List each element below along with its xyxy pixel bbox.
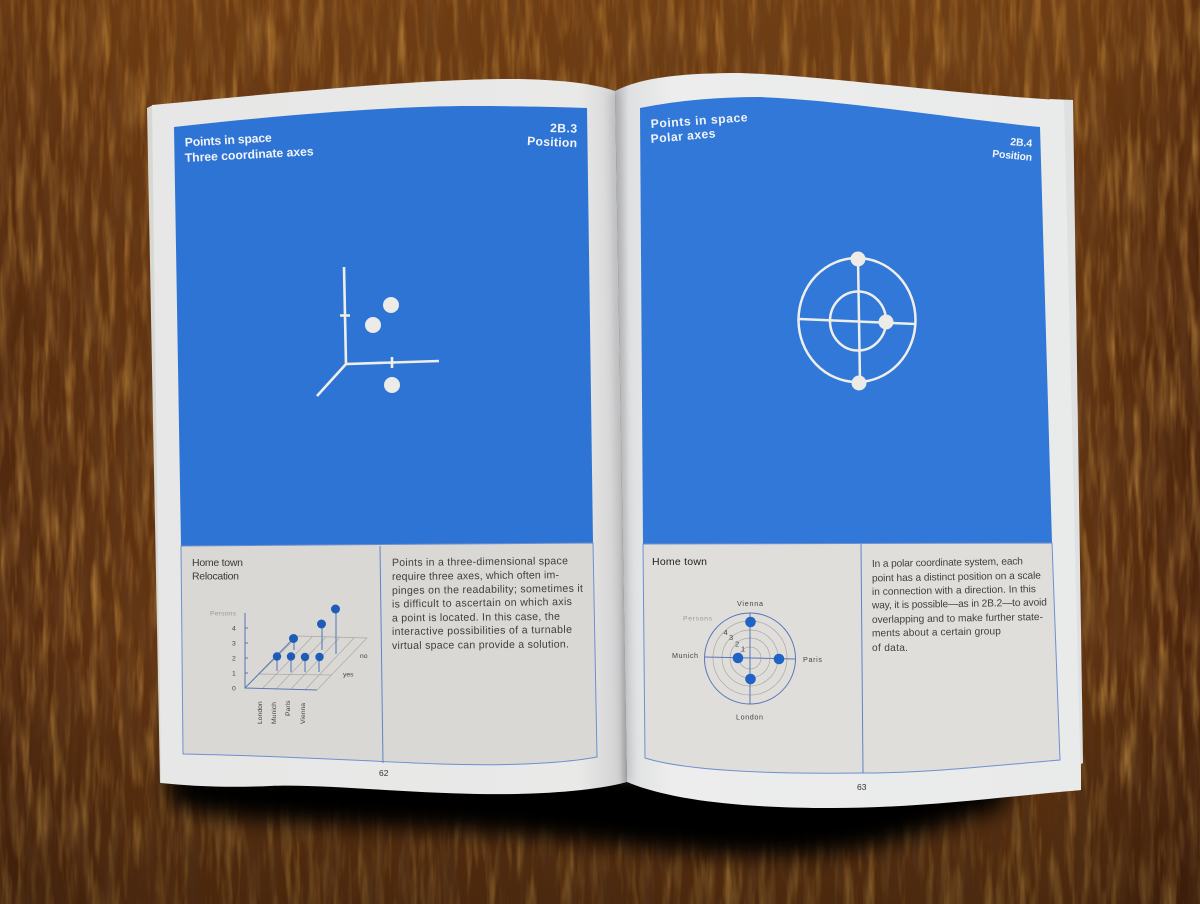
left body text: virtual space can provide a solution. [392,638,569,652]
left panel caption [192,557,243,582]
axis labels: London [257,701,264,724]
labels: Paris [803,655,822,664]
book shadow on table [165,770,1020,856]
axis labels: 3 [232,640,236,648]
heading: right title: Polar axes [650,126,716,146]
heading: right title: Points in space [650,110,748,131]
right body text: of data. [872,643,908,654]
axis labels: yes [343,672,354,678]
stems [277,609,336,672]
right body text: ments about a certain group [872,626,1001,639]
labels: 2 [735,640,739,648]
heading: left title: Three coordinate axes [184,144,314,165]
axis labels: 1 [232,670,236,678]
axes [317,267,439,396]
outer ring and axes [705,613,795,704]
labels: 1 [741,644,745,654]
axis labels: 0 [232,686,236,692]
heading: left section number: 2B.3 [550,121,577,136]
points [273,604,340,661]
3D scatter chart [210,604,368,724]
axis labels [210,610,368,724]
axis labels: Vienna [300,703,307,724]
data points [365,297,400,393]
page number 62: 62 [379,768,389,778]
large diagram: polar axes [798,252,916,390]
labels [672,599,822,722]
axis labels: no [360,653,368,660]
labels: London [736,712,763,722]
left body text: a point is located. In this case, the [392,611,560,624]
left page: lower info panel [181,543,597,765]
labels: Munich [672,651,698,660]
left body text: is difficult to ascertain on which axis [392,596,572,610]
right panel caption: Home town [652,556,707,568]
page stack: left edge [147,105,165,783]
left panel caption: Relocation [192,570,239,582]
labels: Vienna [737,599,763,608]
axis labels: Munich [271,702,278,724]
data points [850,252,894,390]
heading: left section number [527,121,577,150]
axis labels: 2 [232,656,236,662]
right body text: in connection with a direction. In this [872,584,1036,598]
heading: right section number [992,136,1033,164]
heading: right section number: Position [992,148,1033,164]
axes [245,613,317,690]
labels: Persons [683,616,713,622]
left body text: require three axes, which often im- [392,569,559,583]
heading: left title: Points in space [184,131,272,149]
axis labels: 4 [232,626,236,632]
right page: lower info panel [643,543,1060,773]
large diagram: three coordinate axes [317,267,439,396]
inner rings [713,621,787,695]
right body text: point has a distinct position on a scale [872,571,1041,584]
left body text: Points in a three-dimensional space [392,555,568,569]
labels: 3 [729,633,733,642]
right body text: overlapping and to make further state- [872,612,1043,626]
rings and axes [798,258,916,382]
floor grid [245,636,367,690]
heading: right section number: 2B.4 [1010,136,1033,150]
page number 63: 63 [857,782,867,792]
right body text [871,556,1047,654]
right body text: In a polar coordinate system, each [872,556,1023,570]
left page: sheet [152,79,627,794]
axis labels: Persons [210,610,237,618]
heading: left section number: Position [527,134,577,150]
open book [147,73,1083,808]
axis labels: Paris [285,700,292,716]
heading: left title [184,131,314,165]
right page: sheet [615,73,1081,808]
left panel caption: Home town [192,557,243,569]
points [733,617,784,684]
left body text: pinges on the readability; sometimes it [392,583,583,597]
left body text [392,555,583,652]
page stack: right edge [1050,99,1083,791]
gutter shading [615,92,627,782]
right page: blue panel [640,97,1052,544]
labels: 4 [724,628,728,637]
left page: blue panel [174,106,593,546]
polar chart [672,599,822,722]
heading: right title [650,110,748,146]
right body text: way, it is possible—as in 2B.2—to avoid [871,597,1047,612]
left body text: interactive possibilities of a turnable [392,624,572,638]
